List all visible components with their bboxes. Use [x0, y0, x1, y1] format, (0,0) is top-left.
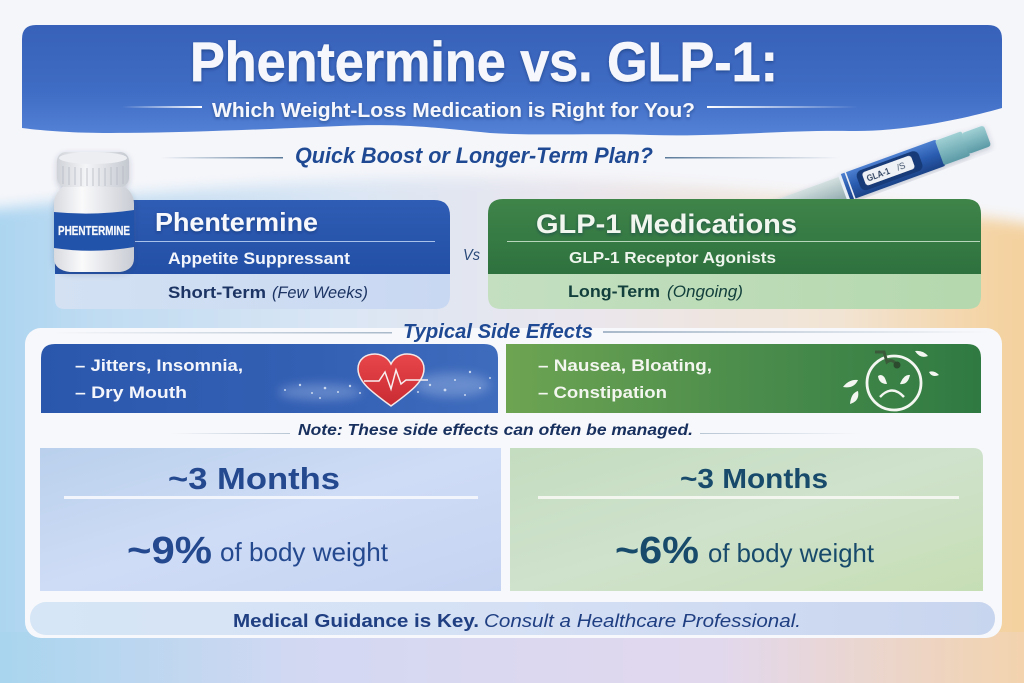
panel: GLP-1 side effects — [506, 344, 981, 413]
panel: GLP-1 side effects: – Constipation — [538, 383, 667, 402]
footer callout: Medical Guidance is Key. — [233, 611, 479, 631]
vs label: Vs — [463, 247, 480, 264]
heading: typical side effects: Typical Side Effects — [403, 321, 593, 343]
panel: phentermine result — [40, 448, 501, 591]
footer callout: Consult a Healthcare Professional. — [484, 611, 801, 631]
text: – Jitters, Insomnia, — [75, 356, 243, 375]
duration — [568, 283, 743, 301]
heading: GLP-1 Medications — [536, 209, 797, 239]
result — [615, 530, 875, 572]
duration: Short-Term — [168, 284, 266, 302]
panel: lower card — [25, 328, 1002, 638]
panel: Phentermine — [55, 200, 450, 309]
icon: GLP-1 pen — [766, 122, 992, 228]
duration: ~3 Months — [680, 463, 828, 494]
panel: GLP-1 result — [510, 448, 983, 591]
footer callout — [30, 602, 995, 635]
class: Appetite Suppressant — [168, 249, 350, 268]
result: ~6% — [615, 530, 699, 572]
panel: GLP-1 Medications — [488, 199, 981, 309]
duration: (Few Weeks) — [272, 284, 368, 302]
header banner — [22, 25, 1002, 135]
sparkle texture — [278, 371, 491, 400]
icon: pill bottle: PHENTERMINE — [58, 223, 130, 238]
text: – Nausea, Bloating, — [538, 356, 712, 375]
title: Phentermine vs. GLP-1: — [190, 30, 778, 93]
result: of body weight — [220, 537, 389, 567]
icon: GLP-1 pen: GLA-1 — [865, 166, 891, 184]
heading: Phentermine — [155, 207, 318, 237]
duration: Long-Term — [568, 283, 660, 301]
result — [127, 530, 389, 572]
result: ~9% — [127, 530, 212, 572]
note: Note: These side effects can often be managed. — [298, 422, 693, 439]
duration: ~3 Months — [168, 461, 340, 496]
icon: GLP-1 pen: /S — [895, 160, 907, 173]
panel: phentermine side effects — [41, 344, 498, 413]
duration: (Ongoing) — [667, 283, 743, 301]
subtitle: Which Weight-Loss Medication is Right for You? — [212, 100, 695, 122]
icon: pill bottle — [54, 152, 134, 272]
result: of body weight — [708, 538, 875, 568]
class: GLP-1 Receptor Agonists — [569, 250, 776, 267]
duration — [168, 284, 368, 302]
icon: heart — [358, 354, 428, 406]
panel: phentermine side effects: – Dry Mouth — [75, 383, 187, 402]
question heading: Quick Boost or Longer-Term Plan? — [295, 143, 653, 168]
icon: nausea face — [843, 351, 939, 410]
